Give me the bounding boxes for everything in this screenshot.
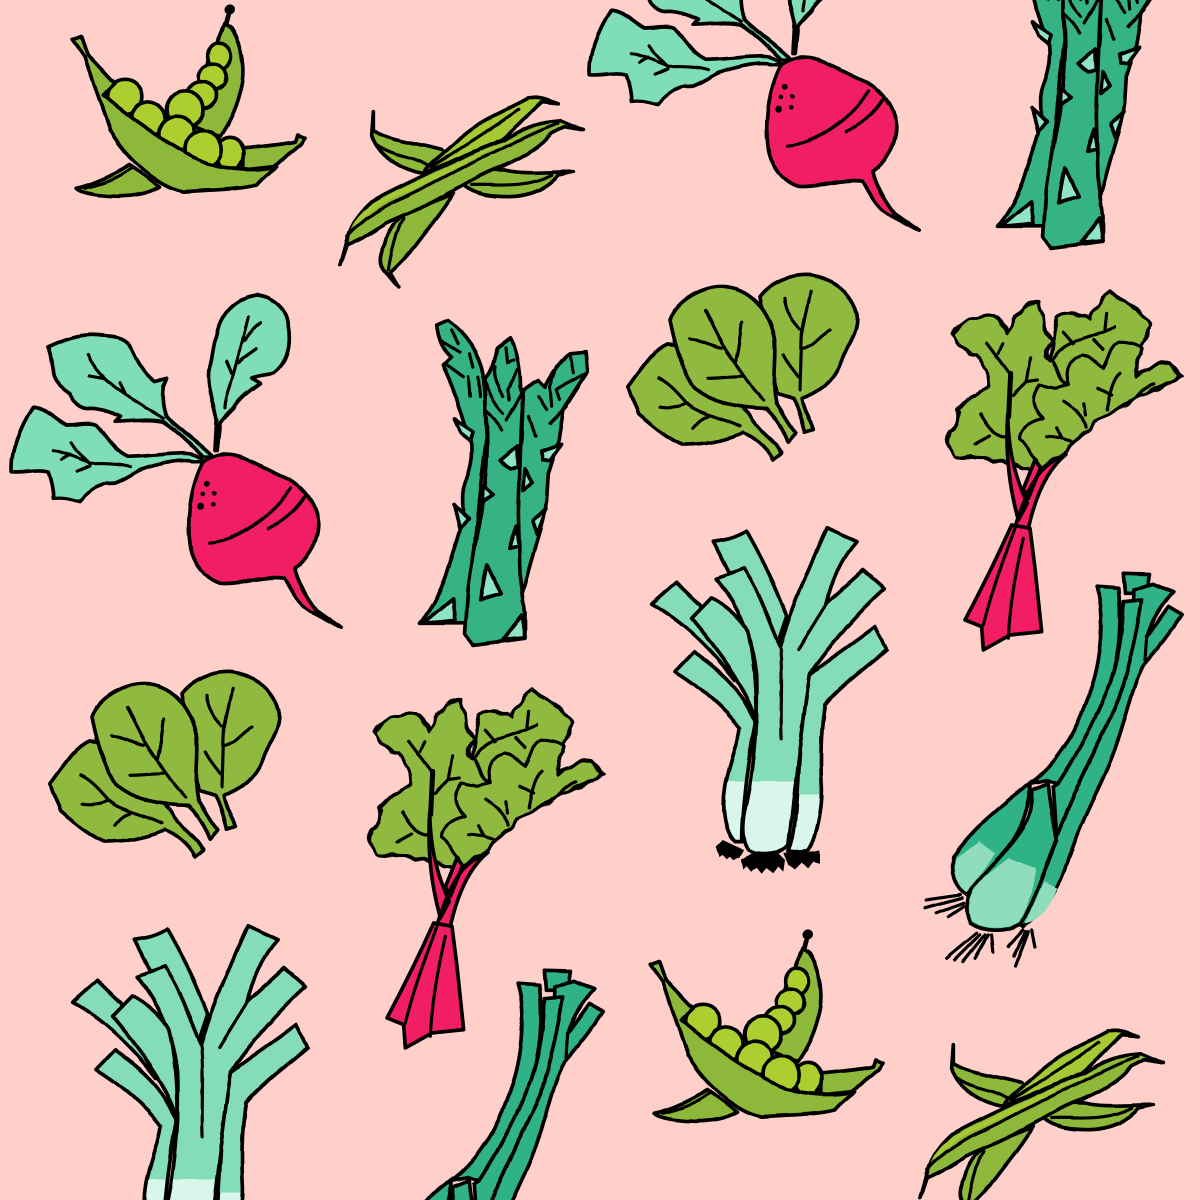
rhubarb base [965,525,1042,650]
pea pod: back right [193,23,243,137]
pea pod: front [73,36,277,192]
pea pod: stem [226,9,230,26]
pea pod: stem tip [225,4,235,14]
leek leaf: inner left [692,598,757,722]
rhubarb leaf veins [975,313,1153,460]
asparagus tip lines [440,330,587,437]
rhubarb stalks [1007,415,1066,530]
leek roots [717,840,820,874]
onion leaf top [1123,573,1150,593]
leek leaf: left [675,652,755,842]
green beans, top centre [340,97,583,287]
asparagus scales [423,419,562,639]
beet, top right [589,0,920,231]
beet root [189,454,342,628]
leek, centre right [652,528,887,874]
beet leaf: upper left [48,335,213,457]
onion bulb: left [952,783,1030,895]
leek centre stalk with upper leaves [717,528,884,854]
spinach, lower left [50,672,279,857]
asparagus, top right [998,0,1166,248]
green onion, bottom centre [346,970,603,1200]
leek leaf: right [788,627,887,853]
rhubarb, lower centre [370,690,604,1048]
asparagus stalk: left [420,320,487,623]
pea pod, top left [73,4,305,196]
asparagus stalk: right [517,352,588,603]
beet, centre left [11,295,342,628]
onion bulb: centre [966,783,1057,930]
rhubarb midrib [1009,373,1011,417]
onion stalk: middle [1053,600,1142,837]
leek leaf: far left [652,582,735,680]
asparagus stalk: middle [465,338,525,645]
bean: lower [380,193,453,287]
spinach leaf: middle [670,287,797,443]
pea pod: back lower tips [77,135,305,196]
asparagus, centre [420,320,588,645]
leek, bottom left [73,926,308,1200]
onion bulb: right tip [1025,882,1057,924]
bean: upper [423,97,558,173]
peas [108,43,244,171]
beet leaf: top [208,295,289,450]
spinach leaf: left [628,343,782,460]
green beans, bottom right [920,1030,1163,1200]
rhubarb leaf [948,292,1182,468]
spinach leaf: right [760,275,857,433]
pea pod, bottom centre right [651,929,883,1121]
onion roots [925,895,1035,967]
bean: long [340,121,583,265]
onion stalk: left [1030,587,1120,783]
spinach, centre right [628,275,857,460]
leek inner lines [780,603,827,738]
green onion, right [925,573,1182,967]
rhubarb, right [948,292,1182,650]
onion stalk: right [1020,583,1182,927]
beet leaf: lower left [11,407,203,502]
bean: crossing [372,112,573,197]
leek leaf: back centre [713,531,787,642]
